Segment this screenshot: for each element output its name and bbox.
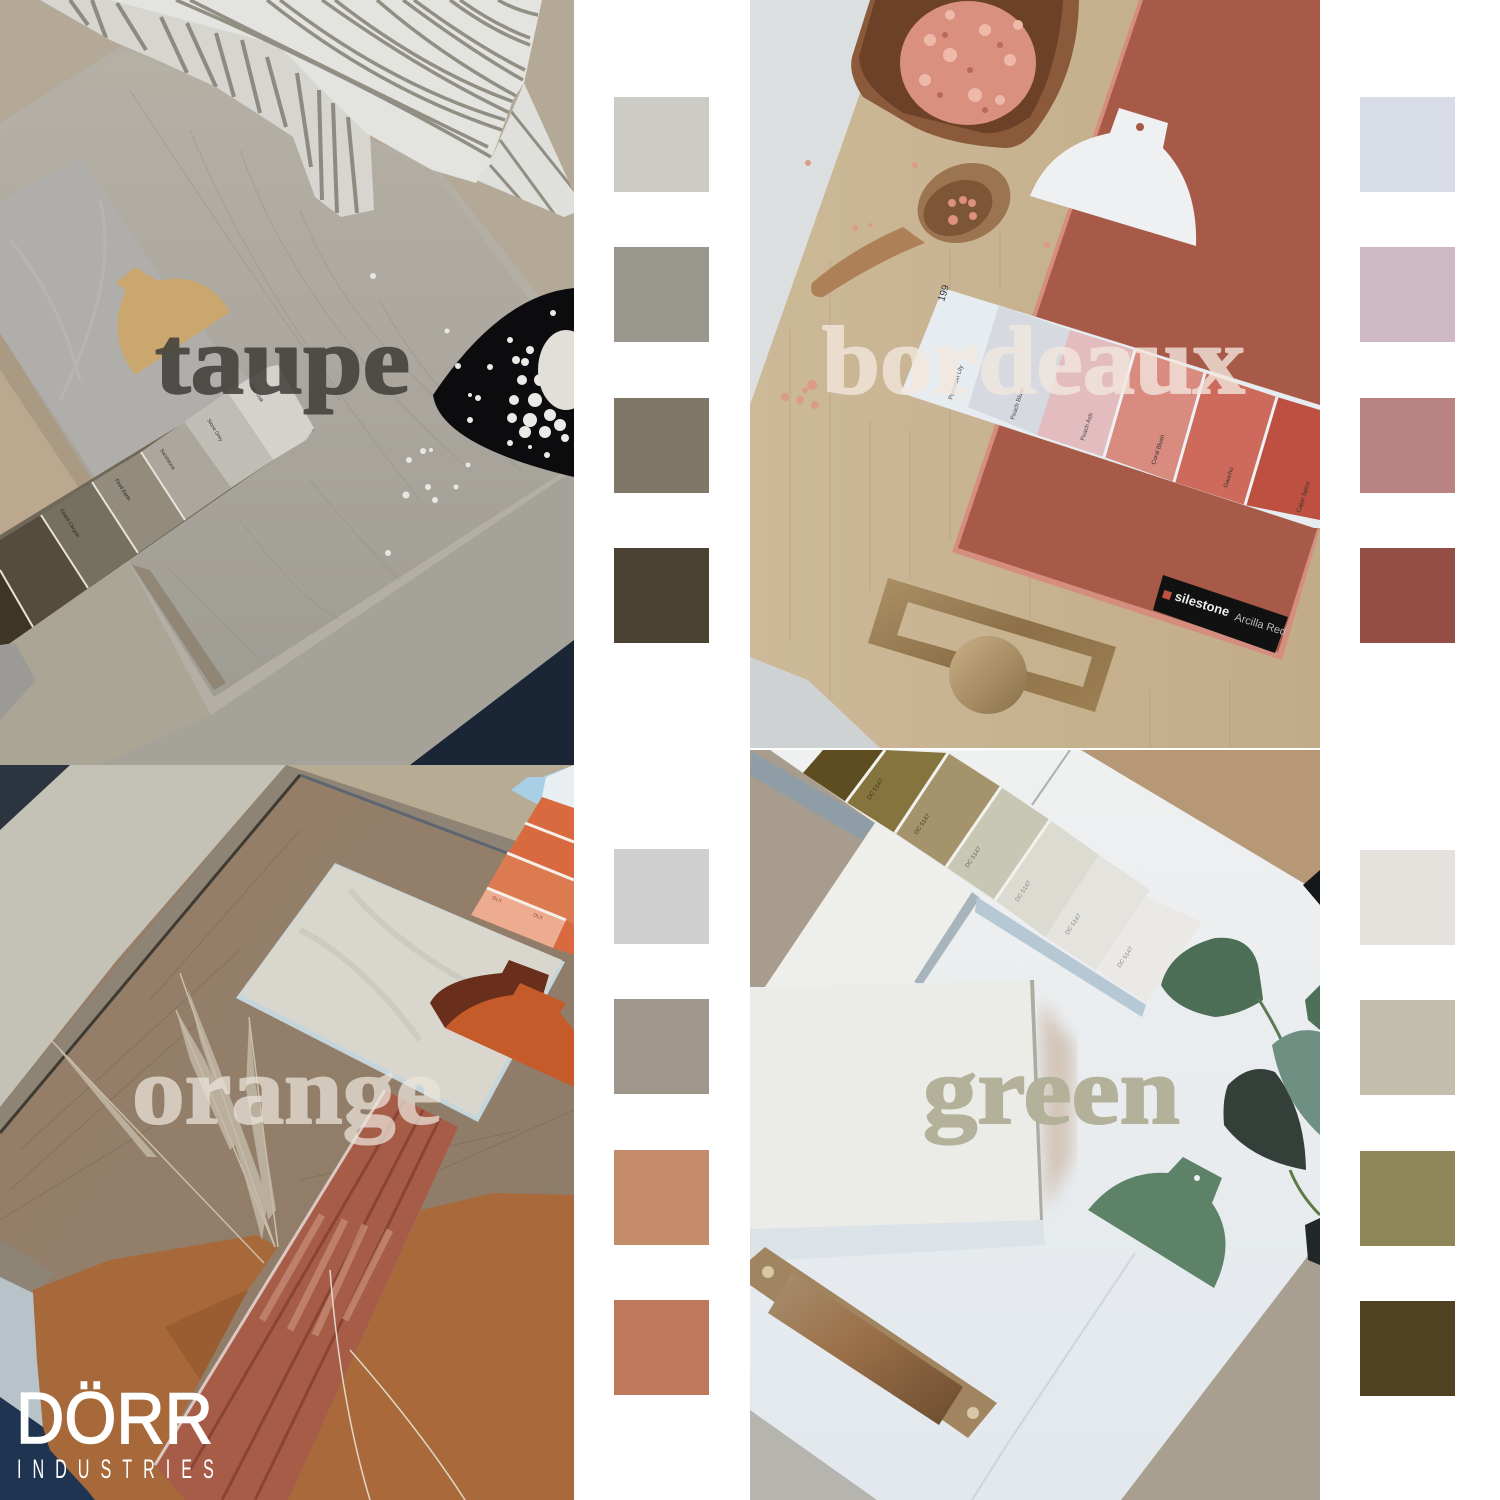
scattered salt <box>370 273 470 556</box>
paint chip strip: Coral Blush <box>1151 434 1166 466</box>
paint chip strip: Peach Ash <box>1080 412 1095 442</box>
paint chip strip: Fired Earth <box>113 478 132 502</box>
paint chip strip: DLX <box>491 895 503 905</box>
marble slab <box>236 863 565 1122</box>
ribbed tile <box>155 1090 458 1500</box>
paint chip strip <box>471 765 574 955</box>
linen cloth <box>33 1193 574 1500</box>
paint chip strip: DC 5147 <box>1015 880 1033 903</box>
paint chip strip: Peach Blush <box>1010 387 1026 421</box>
paint chip strip: Porcelain Lily <box>948 365 965 401</box>
paint chip strip: Gaucho <box>1223 466 1236 489</box>
paint chip strip: 199 <box>936 283 952 303</box>
paint chip strip: DLX <box>532 912 544 922</box>
paint chip strip: Stone Grey <box>205 418 224 443</box>
heading: bordeaux: bordeaux <box>822 307 1245 414</box>
eucalyptus leaves <box>1161 938 1320 1265</box>
swatches: taupe palette <box>614 97 709 643</box>
paint chip strip <box>0 365 314 650</box>
paint chip strip: Grand Canyon <box>58 508 81 539</box>
icon: brown and orange tags <box>430 960 574 1087</box>
tan shadow beside slab <box>1040 1000 1074 1210</box>
silestone label: Arcilla Red <box>1233 611 1287 638</box>
swatches: bordeaux palette <box>1360 97 1455 643</box>
paint chip strip: DC 5147 <box>867 778 885 801</box>
paint chip strip: Pale Oak <box>248 383 265 404</box>
paint chip strip <box>901 283 1320 528</box>
paint chip strip: DC 5147 <box>1117 946 1135 969</box>
panel: green photo <box>750 750 1320 1500</box>
wooden bowl of salt <box>851 0 1079 148</box>
icon: white tag <box>1030 108 1196 246</box>
silestone label: silestone <box>1173 589 1231 619</box>
swatches: orange palette <box>614 849 709 1395</box>
heading: orange: orange <box>132 1037 442 1144</box>
paint chip strip: DC 5147 <box>914 813 932 836</box>
wooden spoon <box>811 163 1010 298</box>
brass cup pull <box>750 1247 997 1438</box>
panel: orange photo <box>0 765 574 1500</box>
paint chip strip: DC 5147 <box>965 846 983 869</box>
striped towel <box>40 0 574 217</box>
silestone label <box>1153 575 1288 653</box>
paint chip strip <box>803 750 1202 1003</box>
heading: green: green <box>923 1037 1180 1144</box>
panel: taupe photo <box>0 0 594 765</box>
black plate with salt and candle <box>433 288 574 477</box>
dried grass <box>51 973 465 1500</box>
icon: gold tag <box>116 267 230 375</box>
white quartz slab <box>917 983 924 985</box>
paint chip strip: DC 5147 <box>1065 913 1083 936</box>
icon: green tag <box>1088 1157 1226 1288</box>
swatches: green palette <box>1360 850 1455 1396</box>
logo: Dörr Industries: DÖRR <box>16 1379 213 1459</box>
paint chip strip: Cajun Spice <box>1296 480 1312 514</box>
paint chip strip: Sandstone <box>158 448 176 472</box>
panel: bordeaux photo <box>750 0 1320 748</box>
heading: taupe: taupe <box>155 307 410 414</box>
brass handle <box>868 578 1116 714</box>
logo: Dörr Industries: INDUSTRIES <box>17 1454 214 1484</box>
